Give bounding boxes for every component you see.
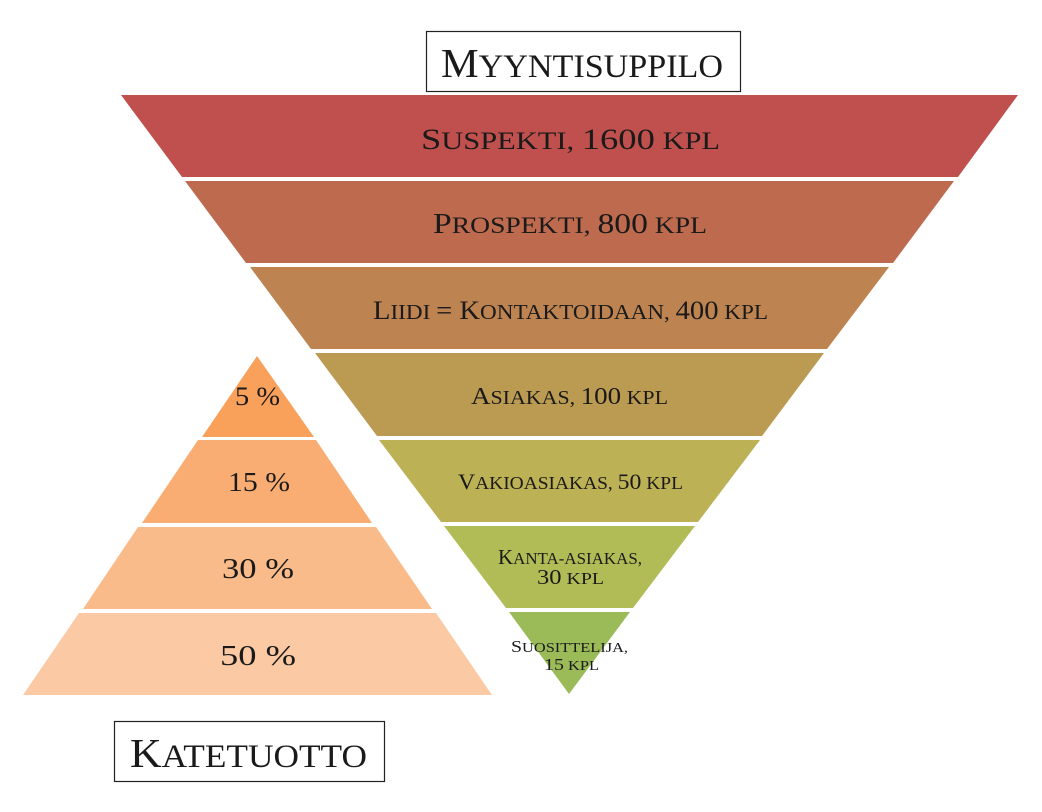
- pyramid level: 15 %: [142, 440, 372, 523]
- pyramid level: 30 %: 30 %: [222, 553, 294, 585]
- funnel level: Vakioasiakas: [379, 440, 760, 522]
- funnel level: Suspekti: [121, 95, 1018, 177]
- funnel level: Asiakas: ASIAKAS, 100 KPL: [471, 384, 668, 410]
- funnel level: Prospekti: PROSPEKTI, 800 KPL: [433, 209, 707, 240]
- funnel level: Kanta-asiakas: 30 KPL: [537, 565, 604, 589]
- funnel level: Suspekti: SUSPEKTI, 1600 KPL: [421, 123, 720, 156]
- funnel level: Prospekti: [185, 181, 954, 263]
- pyramid level: 50 %: 50 %: [220, 640, 296, 672]
- sales funnel: [121, 95, 1018, 694]
- funnel level: Liidi: [250, 267, 889, 349]
- funnel level: Kanta-asiakas: KANTA-ASIAKAS,: [498, 545, 642, 569]
- funnel level: Liidi: LIIDI = KONTAKTOIDAAN, 400 KPL: [373, 296, 768, 325]
- funnel level: Suosittelija: SUOSITTELIJA,: [511, 637, 628, 656]
- margin pyramid: [23, 356, 492, 695]
- funnel level: Vakioasiakas: VAKIOASIAKAS, 50 KPL: [458, 469, 683, 494]
- title: Katetuotto: [114, 722, 384, 782]
- pyramid level: 5 %: [202, 356, 314, 437]
- pyramid level: 50 %: [23, 613, 492, 695]
- funnel level: Asiakas: [315, 353, 824, 436]
- pyramid level: 15 %: 15 %: [228, 467, 290, 497]
- funnel level: Suosittelija: [509, 612, 630, 694]
- title: Katetuotto: KATETUOTTO: [130, 730, 367, 776]
- funnel level: Suosittelija: 15 KPL: [544, 655, 599, 674]
- pyramid level: 30 %: [83, 527, 432, 609]
- pyramid level: 5 %: 5 %: [235, 382, 280, 411]
- title: Myyntisuppilo: [426, 32, 740, 92]
- title: Myyntisuppilo: MYYNTISUPPILO: [441, 40, 723, 86]
- funnel level: Kanta-asiakas: [444, 526, 695, 608]
